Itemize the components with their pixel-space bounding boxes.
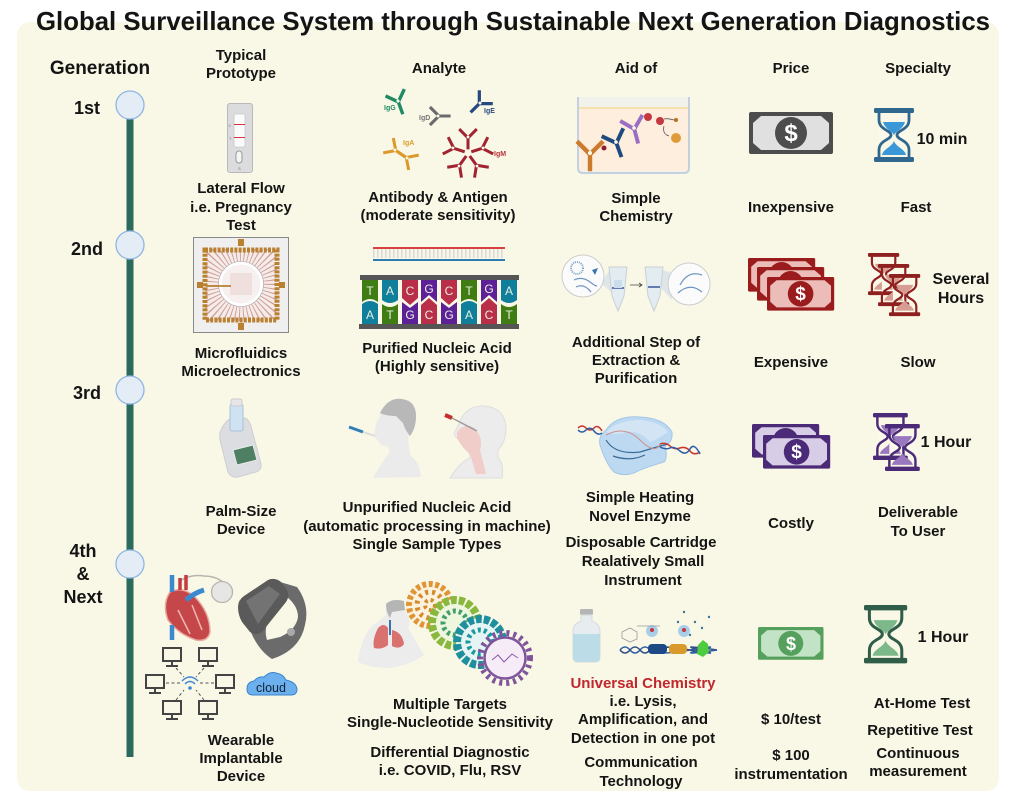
text: communication technology: Technology (599, 773, 683, 790)
text: simple chemistry: Chemistry (599, 208, 673, 225)
icon: wireless computer network (146, 648, 234, 719)
text: extraction: Extraction & (592, 352, 680, 369)
text: 1 hour: 1 Hour (918, 629, 968, 646)
icon: antibodies: IgE (484, 108, 495, 115)
icon: lateral flow test (228, 104, 252, 172)
text: unpurified nucleic acid: Single Sample Types (353, 536, 501, 553)
icon: gray money: $ (784, 120, 798, 147)
icon: nucleic acid base pairs: T (465, 284, 473, 298)
icon: gray money (749, 112, 833, 154)
icon: red money (748, 258, 834, 311)
text: price per test: $ 10/test (761, 711, 821, 728)
text: palm-size device: Palm-Size (206, 503, 276, 520)
text: disposable cartridge: Realatively Small (582, 553, 704, 570)
text: price per test: $ 100 (772, 747, 810, 764)
generation labels: 2nd (71, 239, 103, 259)
text: fast: Fast (901, 199, 931, 216)
text: differential diagnostic: i.e. COVID, Flu, RSV (379, 762, 521, 779)
icon: nucleic acid base pairs: T (366, 284, 374, 298)
text: several hours: Hours (938, 290, 984, 307)
text: costly: Costly (768, 515, 815, 532)
icon: lateral flow test: S (238, 166, 241, 171)
text: disposable cartridge: Disposable Cartridge (566, 534, 716, 551)
text: at-home test specialties: Continuous (876, 745, 960, 762)
text: unpurified nucleic acid: (automatic processing in machine) (303, 518, 551, 535)
icon: cloud: cloud (256, 681, 286, 695)
text: several hours: Several (933, 271, 989, 288)
icon: purple money (752, 424, 830, 469)
text: extraction: Purification (595, 370, 677, 387)
column headings: Specialty (885, 60, 952, 77)
generation labels: 3rd (73, 383, 101, 403)
text: purified nucleic acid: (Highly sensitive) (375, 358, 499, 375)
icon: person with lungs (358, 600, 424, 668)
text: expensive: Expensive (754, 354, 828, 371)
icon: nucleic acid base pairs: A (505, 284, 513, 298)
text: extraction: Additional Step of (572, 334, 701, 351)
text: disposable cartridge: Instrument (604, 572, 682, 589)
icon: lateral flow test: C (228, 123, 232, 128)
text: wearable implantable device: Implantable (199, 750, 283, 767)
text: multiple targets: Multiple Targets (393, 696, 507, 713)
text: lateral flow: Lateral Flow (197, 180, 285, 197)
icon: heart and pacemaker (165, 575, 232, 640)
icon: nucleic acid base pairs: A (386, 284, 394, 298)
text: communication technology: Communication (584, 754, 698, 771)
title: Global Surveillance System through Sustainable Next Generation Diagnostics (36, 6, 990, 36)
column headings: Typical (216, 47, 266, 64)
text: slow: Slow (900, 354, 936, 371)
column headings: Analyte (412, 60, 466, 77)
text: differential diagnostic: Differential Diagnostic (370, 744, 530, 761)
text: at-home test specialties: At-Home Test (874, 695, 970, 712)
icon: nucleic acid base pairs: A (366, 308, 374, 322)
icon: nucleic acid base pairs: G (444, 308, 454, 322)
column headings: Generation (50, 58, 150, 79)
icon: nucleic acid base pairs: G (405, 308, 415, 322)
text: lateral flow: Test (226, 217, 256, 234)
column headings: Prototype (206, 65, 276, 82)
icon: antibodies: IgD (419, 115, 430, 122)
text: palm-size device: Device (217, 521, 265, 538)
text: at-home test specialties: Repetitive Test (867, 722, 973, 739)
text: simple heating, novel enzyme: Novel Enzyme (589, 508, 691, 525)
text: microfluidics: Microfluidics (195, 345, 287, 362)
icon: antibodies (383, 89, 506, 178)
icon: antibodies: IgG (384, 105, 396, 112)
icon: purple hourglasses (873, 413, 920, 471)
icon: nucleic acid base pairs: A (465, 308, 473, 322)
text: at-home test specialties: measurement (869, 763, 967, 780)
icon: simple chemistry well (577, 97, 689, 173)
icon: antibodies: IgA (403, 140, 414, 147)
icon: nucleic acid base pairs: C (485, 308, 494, 322)
icon: universal chemistry reaction (620, 611, 717, 657)
text: wearable implantable device: Device (217, 768, 265, 785)
icon: patient with nasal swab (445, 406, 506, 478)
icon: dna strand (373, 248, 505, 260)
text: deliverable to user: To User (891, 523, 946, 540)
text: 1 hour: 1 Hour (921, 434, 971, 451)
icon: patient with mouth swab (349, 399, 421, 478)
icon: green hourglass (864, 605, 907, 663)
icon: palm-size device (220, 399, 261, 477)
icon: nucleic acid base pairs: T (386, 308, 394, 322)
text: universal chemistry: i.e. Lysis, (610, 693, 676, 710)
icon: nucleic acid base pairs: C (406, 284, 415, 298)
icon: enzyme with dna (578, 417, 700, 475)
generation labels: & (76, 564, 90, 584)
text: lateral flow: i.e. Pregnancy (190, 199, 293, 216)
icon: blue hourglass (874, 108, 914, 162)
icon: nucleic acid base pairs: C (445, 284, 454, 298)
text: multiple targets: Single-Nucleotide Sensitivity (347, 714, 554, 731)
icon: purple money: $ (791, 442, 802, 463)
icon: virus cluster (406, 581, 530, 683)
timeline (116, 91, 144, 757)
text: purified nucleic acid: Purified Nucleic Acid (362, 340, 512, 357)
icon: nucleic acid base pairs: T (505, 308, 513, 322)
text: universal chemistry: Amplification, and (578, 711, 708, 728)
icon: lateral flow test: T (229, 136, 232, 141)
text: unpurified nucleic acid: Unpurified Nucleic Acid (343, 499, 511, 516)
text: price per test: instrumentation (734, 766, 848, 783)
icon: extraction tubes (562, 255, 710, 311)
text: antibody and antigen: (moderate sensitivity) (360, 207, 516, 224)
generation labels (63, 98, 103, 607)
text: 10 min: 10 min (917, 131, 967, 148)
icon: red money: $ (795, 284, 806, 305)
generation labels: 1st (74, 98, 100, 118)
text: deliverable to user: Deliverable (878, 504, 958, 521)
text: wearable implantable device: Wearable (208, 732, 274, 749)
icon: cloud (247, 672, 297, 695)
icon: nucleic acid base pairs: G (424, 282, 434, 296)
column headings: Aid of (615, 60, 658, 77)
text: simple heating, novel enzyme: Simple Heating (586, 489, 694, 506)
icon: microfluidic chip (194, 238, 288, 332)
text: inexpensive: Inexpensive (748, 199, 834, 216)
icon: antibodies: IgM (494, 151, 506, 158)
column headings: Price (773, 60, 809, 77)
icon: green money: $ (786, 634, 796, 654)
text: universal chemistry: Detection in one pot (571, 730, 715, 747)
text: simple chemistry: Simple (611, 190, 661, 207)
icon: green money (758, 627, 824, 660)
text: microfluidics: Microelectronics (181, 363, 301, 380)
text: antibody and antigen: Antibody & Antigen (368, 189, 508, 206)
icon: reagent vial (573, 609, 600, 662)
generation labels: 4th (70, 541, 96, 561)
column headings (50, 47, 952, 82)
icon: smartwatch (238, 579, 306, 659)
text: universal chemistry: Universal Chemistry (570, 675, 716, 692)
icon: nucleic acid base pairs (359, 275, 519, 329)
icon: nucleic acid base pairs: G (484, 282, 494, 296)
generation labels: Next (63, 587, 103, 607)
icon: red hourglasses (868, 253, 920, 316)
icon: nucleic acid base pairs: C (425, 308, 434, 322)
